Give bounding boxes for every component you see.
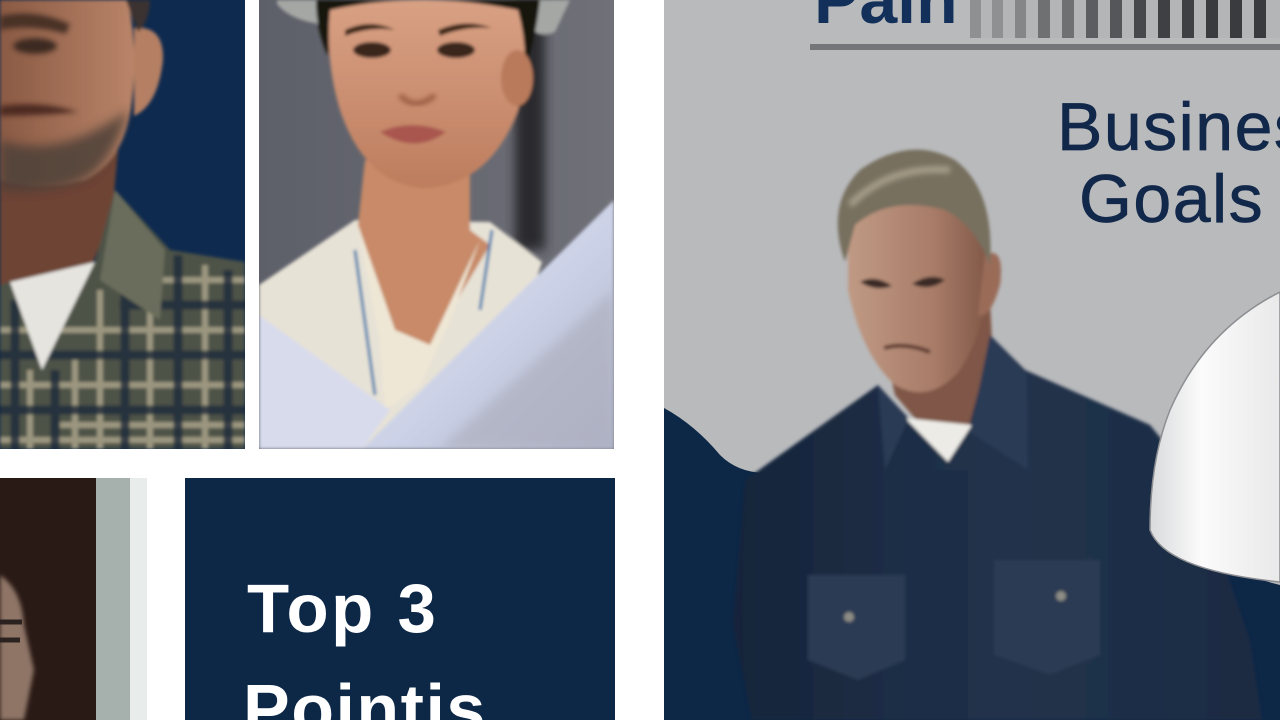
placket — [925, 470, 968, 720]
shirt body — [733, 335, 1262, 720]
neck — [890, 308, 994, 426]
lips — [380, 125, 446, 144]
eyes — [860, 277, 945, 288]
coat base — [259, 220, 542, 449]
collar — [878, 335, 1028, 470]
man in navy work shirt — [733, 150, 1262, 720]
heading: top 3 points — [243, 570, 487, 720]
hair — [316, 0, 540, 60]
blouse — [430, 242, 480, 344]
blueprint rolls — [259, 315, 390, 449]
photo panel: man in plaid shirt — [0, 0, 245, 449]
helmet edge — [277, 0, 570, 34]
beard — [0, 110, 128, 192]
eye and brow — [0, 13, 70, 34]
panel: navy title card — [185, 478, 615, 720]
navy wave — [664, 408, 1280, 720]
white hard hat — [1150, 292, 1280, 582]
heading: business goals — [1062, 100, 1280, 223]
neck — [358, 160, 490, 345]
face — [848, 190, 990, 392]
nose shade — [400, 95, 435, 104]
chest pockets — [808, 575, 905, 680]
heading: top 3 points: Top 3 — [247, 570, 438, 647]
mouth — [884, 346, 930, 352]
undershirt — [905, 418, 972, 462]
ear — [134, 28, 163, 116]
brows and eyes — [345, 23, 492, 36]
neck — [0, 150, 118, 285]
panel: business goals — [664, 0, 1280, 720]
rule under heading — [810, 44, 1280, 50]
collar — [100, 190, 165, 320]
mouth — [0, 104, 78, 116]
photo panel: woman with blueprint roll — [259, 0, 614, 449]
heading: business goals: Goals — [1079, 161, 1264, 237]
white undershirt — [10, 262, 95, 370]
lanyard — [355, 230, 492, 395]
ear — [501, 50, 533, 106]
hair — [838, 150, 991, 265]
face — [0, 0, 134, 186]
plaid shirt — [0, 190, 245, 449]
ear — [978, 253, 1001, 316]
face — [329, 0, 525, 188]
barcode strip — [970, 0, 1280, 38]
face — [0, 575, 34, 720]
photo panel: partial face near a window — [0, 478, 147, 720]
hair — [126, 0, 150, 32]
